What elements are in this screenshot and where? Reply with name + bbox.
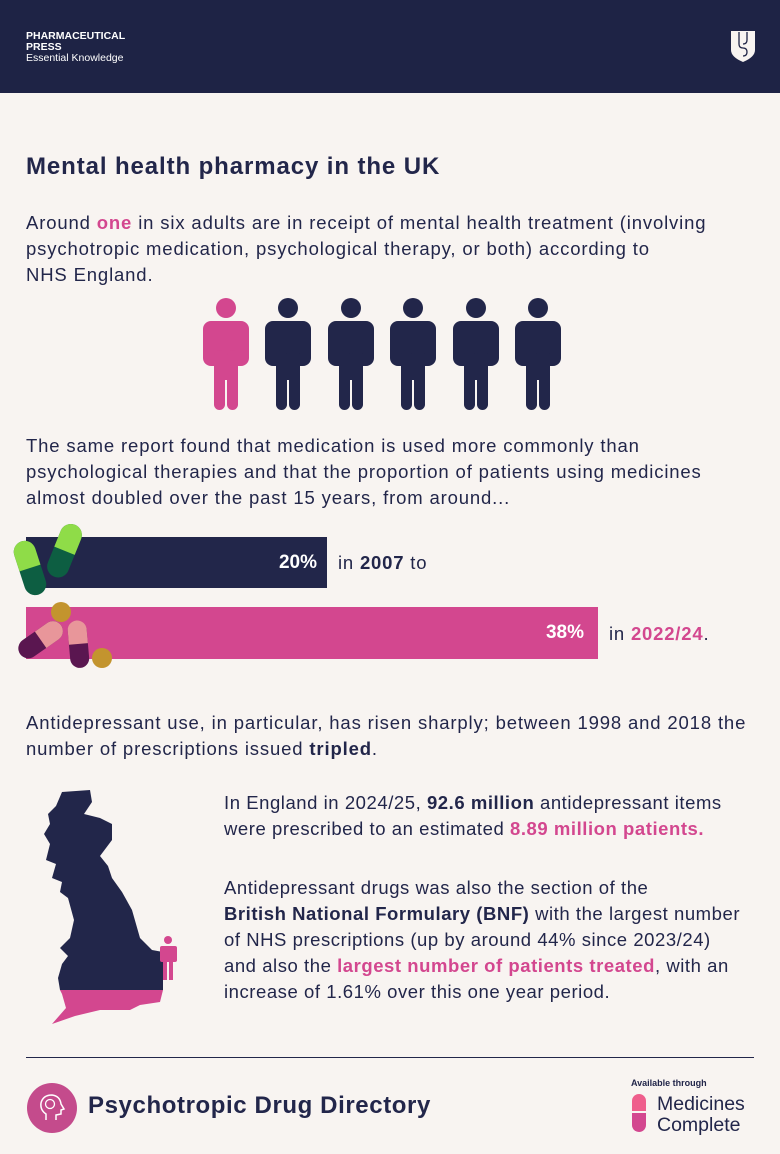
icon: head — [27, 1083, 77, 1133]
text: BNF: Antidepressant drugs was also the section of the — [224, 877, 648, 898]
footer: product — [27, 1083, 431, 1133]
text: BNF: and also the largest number of patients treated, with an — [224, 955, 729, 976]
header bar — [0, 0, 780, 93]
footer: Medicines Complete: Medicines — [657, 1093, 745, 1115]
logo text: PRESS — [26, 41, 62, 53]
logo text: PHARMACEUTICAL — [26, 30, 125, 42]
logo text — [26, 30, 125, 64]
text: England 2024/25 — [224, 792, 722, 839]
icon: pills — [14, 524, 112, 668]
icon: shield logo — [731, 31, 755, 62]
bar: 2022/24: 38% — [546, 622, 584, 643]
bar: 2022/24 — [26, 607, 598, 659]
people dark — [265, 298, 561, 410]
intro text — [26, 212, 706, 285]
intro text: Around one in six adults are in receipt of mental health treatment (involving — [26, 212, 706, 233]
icon row: six people — [203, 298, 561, 410]
text: antidepressant rise: number of prescriptions issued tripled. — [26, 738, 378, 759]
map: UK — [44, 790, 177, 1024]
footer: Medicines Complete: Complete — [657, 1114, 740, 1136]
text: BNF: British National Formulary (BNF) with the largest number — [224, 903, 740, 924]
logo text: Essential Knowledge — [26, 52, 123, 64]
label 2007: in 2007 to — [338, 552, 427, 573]
text: report findings: The same report found that medication is used more commonly than — [26, 435, 640, 456]
product name: Psychotropic Drug Directory — [88, 1092, 431, 1119]
person highlighted — [203, 298, 249, 410]
text: England 2024/25: In England in 2024/25, 92.6 million antidepressant items — [224, 792, 722, 813]
label 2022/24: in 2022/24. — [609, 623, 709, 644]
icon: capsule — [632, 1094, 646, 1132]
intro text: psychotropic medication, psychological therapy, or both) according to — [26, 238, 650, 259]
text: antidepressant rise: Antidepressant use, in particular, has risen sharply; between 1998 and 2018 the — [26, 712, 746, 733]
title: Mental health pharmacy in the UK — [26, 153, 440, 180]
footer: Medicines Complete: Available through — [631, 1078, 707, 1088]
text: BNF — [224, 877, 740, 1002]
footer: Medicines Complete — [631, 1078, 745, 1136]
text: antidepressant rise — [26, 712, 746, 759]
text: BNF: of NHS prescriptions (up by around 44% since 2023/24) — [224, 929, 711, 950]
intro text: NHS England. — [26, 264, 153, 285]
text: England 2024/25: were prescribed to an estimated 8.89 million patients. — [224, 818, 704, 839]
text: BNF: increase of 1.61% over this one year period. — [224, 981, 610, 1002]
text: report findings — [26, 435, 702, 508]
bar: 2007 — [26, 537, 327, 588]
bar: 2007: 20% — [279, 552, 317, 573]
text: report findings: almost doubled over the past 15 years, from around... — [26, 487, 510, 508]
text: report findings: psychological therapies and that the proportion of patients using medicines — [26, 461, 702, 482]
